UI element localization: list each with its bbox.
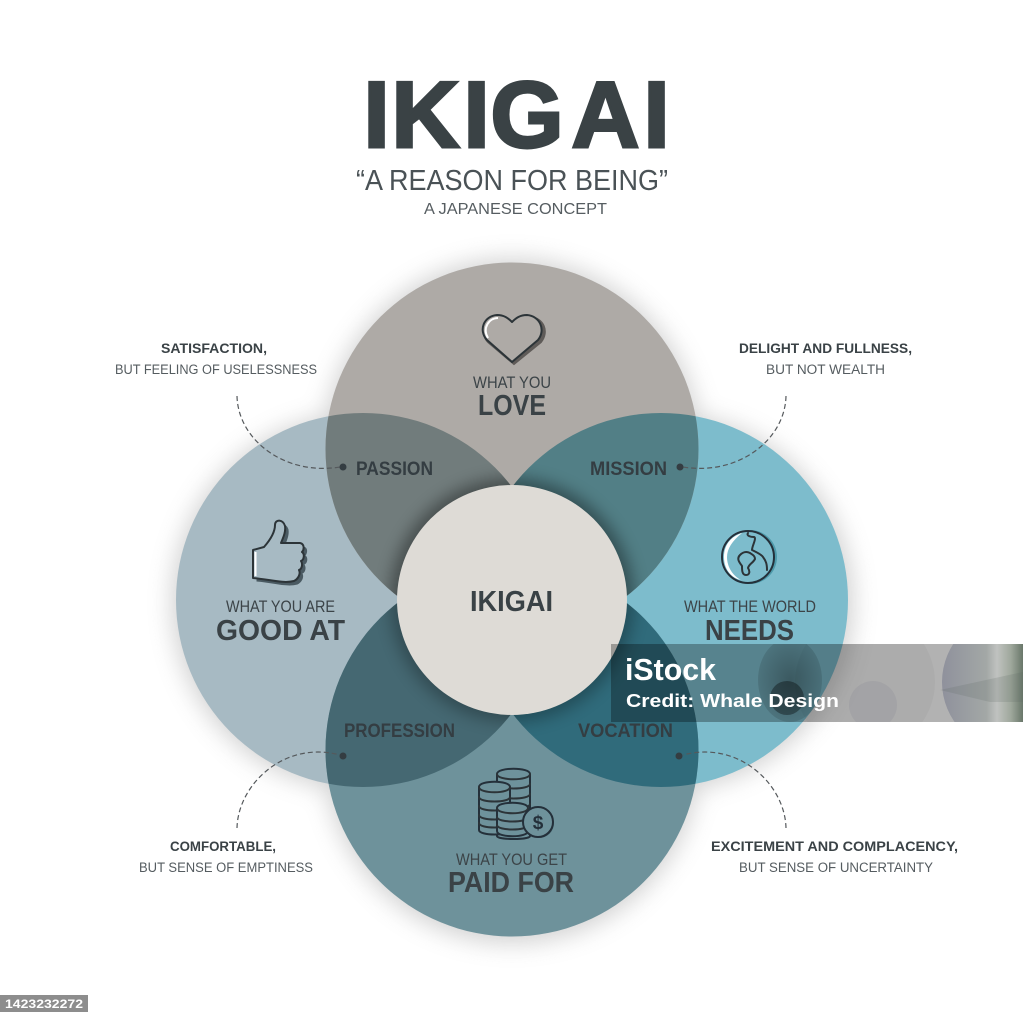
icon: heart xyxy=(483,315,545,364)
callout: delight: DELIGHT AND FULLNESS, xyxy=(739,341,912,356)
watermark band xyxy=(611,644,1023,722)
needs label: WHAT THE WORLD xyxy=(684,598,816,616)
paid for label: PAID FOR xyxy=(448,867,574,899)
watermark credit: Credit: Whale Design xyxy=(626,691,839,711)
lens: vocation xyxy=(514,603,698,787)
vocation label: VOCATION xyxy=(578,721,673,742)
paid for label: WHAT YOU GET xyxy=(456,851,567,869)
center circle xyxy=(397,485,627,715)
subtitle: “A REASON FOR BEING” xyxy=(356,165,668,197)
image id tag: 1423232272 xyxy=(5,997,83,1011)
callout: comfortable: BUT SENSE OF EMPTINESS xyxy=(139,860,313,875)
connector: profession xyxy=(237,752,346,828)
callout: excitement: EXCITEMENT AND COMPLACENCY, xyxy=(711,839,958,854)
callout: excitement: BUT SENSE OF UNCERTAINTY xyxy=(739,860,933,875)
needs label xyxy=(684,598,816,647)
circle: what you love xyxy=(326,262,698,636)
profession label: PROFESSION xyxy=(344,721,455,742)
love label: LOVE xyxy=(478,390,546,422)
callout: delight xyxy=(739,341,912,377)
paid for label xyxy=(448,851,574,899)
lens: profession xyxy=(326,603,510,787)
good at label xyxy=(216,598,345,647)
lens: mission xyxy=(514,413,698,596)
love label: WHAT YOU xyxy=(473,374,551,392)
callout: excitement xyxy=(711,839,958,875)
image id tag xyxy=(0,995,88,1012)
icon: globe xyxy=(722,530,777,584)
connector: passion xyxy=(237,396,346,470)
passion label: PASSION xyxy=(356,459,433,480)
good at label: WHAT YOU ARE xyxy=(226,598,335,616)
circle: what you get paid for xyxy=(326,564,698,936)
callout: comfortable xyxy=(139,839,313,875)
callout: satisfaction: SATISFACTION, xyxy=(161,341,267,356)
center label: IKIGAI xyxy=(470,586,553,618)
icon: coins xyxy=(479,769,554,839)
good at label: GOOD AT xyxy=(216,615,345,647)
connector: vocation xyxy=(676,752,786,828)
callout: delight: BUT NOT WEALTH xyxy=(766,362,885,377)
venn diagram xyxy=(172,259,853,943)
callout: comfortable: COMFORTABLE, xyxy=(170,839,276,854)
title: IKIGAI xyxy=(364,62,670,167)
love label xyxy=(473,374,551,422)
circle: what the world needs xyxy=(474,413,848,787)
soft shadows behind circles xyxy=(172,259,853,943)
circle: what you are good at xyxy=(176,413,550,787)
lens: passion xyxy=(326,413,510,596)
tagline: A JAPANESE CONCEPT xyxy=(424,201,607,218)
mission label: MISSION xyxy=(590,459,667,480)
connector: mission xyxy=(676,396,786,470)
center shadow on the four lenses xyxy=(390,478,634,722)
callout: satisfaction xyxy=(115,341,317,377)
watermark brand: iStock xyxy=(625,652,717,687)
icon: coins: $ xyxy=(533,813,544,834)
needs label: NEEDS xyxy=(705,615,794,647)
icon: thumbs up xyxy=(253,521,307,585)
callout: satisfaction: BUT FEELING OF USELESSNESS xyxy=(115,362,317,377)
